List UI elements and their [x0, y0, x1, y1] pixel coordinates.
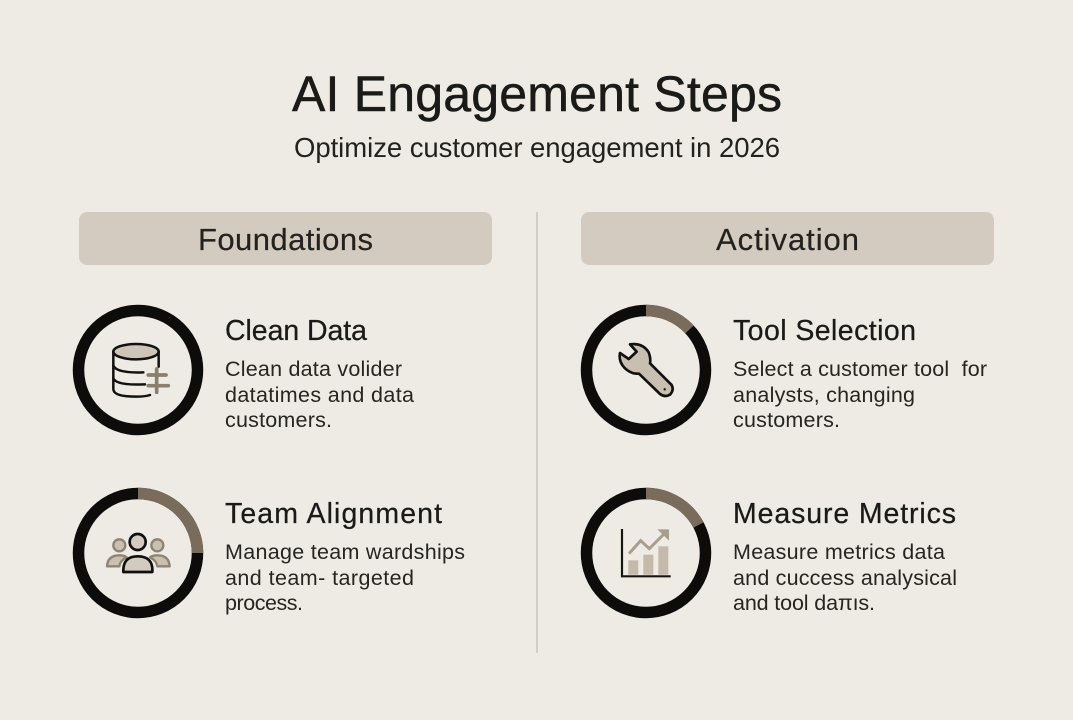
step description: Manage team wardships: [225, 540, 465, 564]
step heading: Tool Selection: [733, 315, 916, 347]
step description: customers.: [733, 408, 840, 432]
title: AI Engagement Steps: [292, 66, 782, 122]
heading: Activation: Activation: [716, 222, 859, 257]
step description: [225, 357, 414, 432]
step description: datatimes and data: [225, 383, 414, 407]
step heading: Clean Data: [225, 315, 367, 347]
step description: and tool daπıs.: [733, 591, 875, 615]
subtitle: Optimize customer engagement in 2026: [294, 132, 780, 163]
panel: foundations column: [78, 212, 492, 615]
step description: Select a customer tool for: [733, 357, 987, 381]
step: Clean Data: [78, 310, 414, 432]
step: Team Alignment: [78, 494, 465, 615]
icon: team ring: [78, 494, 198, 612]
step description: and cuccess analysical: [733, 566, 957, 590]
step description: [225, 540, 465, 615]
step description: analysts, changing: [733, 383, 915, 407]
panel: activation column: [581, 212, 994, 615]
heading: Activation: [581, 212, 994, 265]
step: Measure Metrics: [586, 494, 957, 615]
step heading: Measure Metrics: [733, 498, 956, 530]
step: Tool Selection: [586, 310, 987, 432]
step description: process.: [225, 591, 303, 615]
step description: Measure metrics data: [733, 540, 945, 564]
icon: chart ring: [586, 494, 706, 612]
step description: customers.: [225, 408, 332, 432]
step heading: Team Alignment: [225, 498, 442, 530]
icon: database ring: [78, 310, 198, 430]
icon: wrench ring: [586, 310, 706, 430]
heading: Foundations: [79, 212, 492, 265]
step description: [733, 540, 957, 615]
heading: Foundations: Foundations: [198, 222, 373, 257]
step description: [733, 357, 987, 432]
step description: and team- targeted: [225, 566, 414, 590]
step description: Clean data volider: [225, 357, 402, 381]
